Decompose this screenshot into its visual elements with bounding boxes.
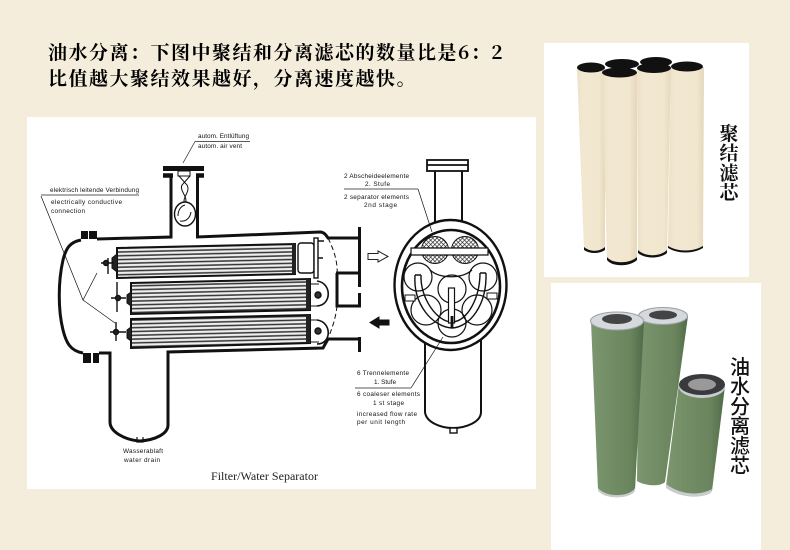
air vent float bbox=[174, 171, 196, 226]
label: coalescing filter: 芯 bbox=[718, 182, 740, 204]
filter elements, side view bbox=[112, 244, 310, 348]
label: coalescing filter: 结 bbox=[719, 143, 739, 165]
diagram labels: autom. air vent bbox=[198, 143, 242, 150]
title text bbox=[48, 38, 504, 91]
diagram labels: 1 st stage bbox=[373, 400, 404, 407]
diagram labels: connection bbox=[51, 208, 85, 215]
coalescing filter cylinders bbox=[577, 57, 704, 265]
label: coalescing filter: 聚 bbox=[719, 124, 739, 145]
diagram labels: 6 Trennelemente bbox=[357, 370, 409, 377]
diagram caption: Filter/Water Separator bbox=[211, 469, 318, 483]
label: oil-water separation filter: 芯 bbox=[730, 450, 750, 478]
panel: coalescing filter element photo bbox=[544, 43, 749, 277]
diagram labels: increased flow rate bbox=[357, 411, 417, 418]
panel: oil-water separation filter element photo bbox=[551, 283, 761, 550]
diagram labels: Wasserablaft bbox=[123, 448, 163, 455]
diagram labels: 2. Stufe bbox=[365, 181, 390, 188]
diagram labels: 6 coaleser elements bbox=[357, 391, 420, 398]
side view vessel outline bbox=[59, 168, 361, 442]
label: oil-water separation filter: 油 bbox=[730, 351, 750, 380]
label: oil-water separation filter: 水 bbox=[730, 371, 750, 400]
label: coalescing filter: 滤 bbox=[719, 162, 740, 184]
diagram labels: electrically conductive bbox=[51, 199, 122, 206]
separator filter cylinders bbox=[590, 308, 725, 497]
diagram labels: 2 Abscheideelemente bbox=[344, 173, 409, 180]
end fittings bbox=[298, 238, 337, 344]
label: oil-water separation filter: 滤 bbox=[730, 430, 750, 459]
flow arrows bbox=[368, 251, 389, 328]
label: oil-water separation filter: 分 bbox=[730, 390, 750, 419]
electrical connection hardware bbox=[41, 196, 126, 341]
title text: 比值越大聚结效果越好，分离速度越快。 bbox=[48, 64, 417, 91]
diagram labels: elektrisch leitende Verbindung bbox=[50, 187, 139, 194]
diagram labels: 2nd stage bbox=[364, 202, 397, 209]
label: oil-water separation filter: 离 bbox=[730, 410, 750, 439]
diagram labels bbox=[41, 133, 420, 464]
title text: 油水分离：下图中聚结和分离滤芯的数量比是6：2 bbox=[48, 38, 504, 65]
diagram labels: 1. Stufe bbox=[374, 379, 396, 386]
panel: filter/water separator diagram bbox=[27, 117, 536, 489]
diagram labels: per unit length bbox=[357, 419, 405, 426]
diagram labels: water drain bbox=[123, 457, 160, 464]
diagram labels: autom. Entlüftung bbox=[198, 133, 249, 140]
diagram labels: 2 separator elements bbox=[344, 194, 409, 201]
cross-section view bbox=[394, 160, 506, 433]
